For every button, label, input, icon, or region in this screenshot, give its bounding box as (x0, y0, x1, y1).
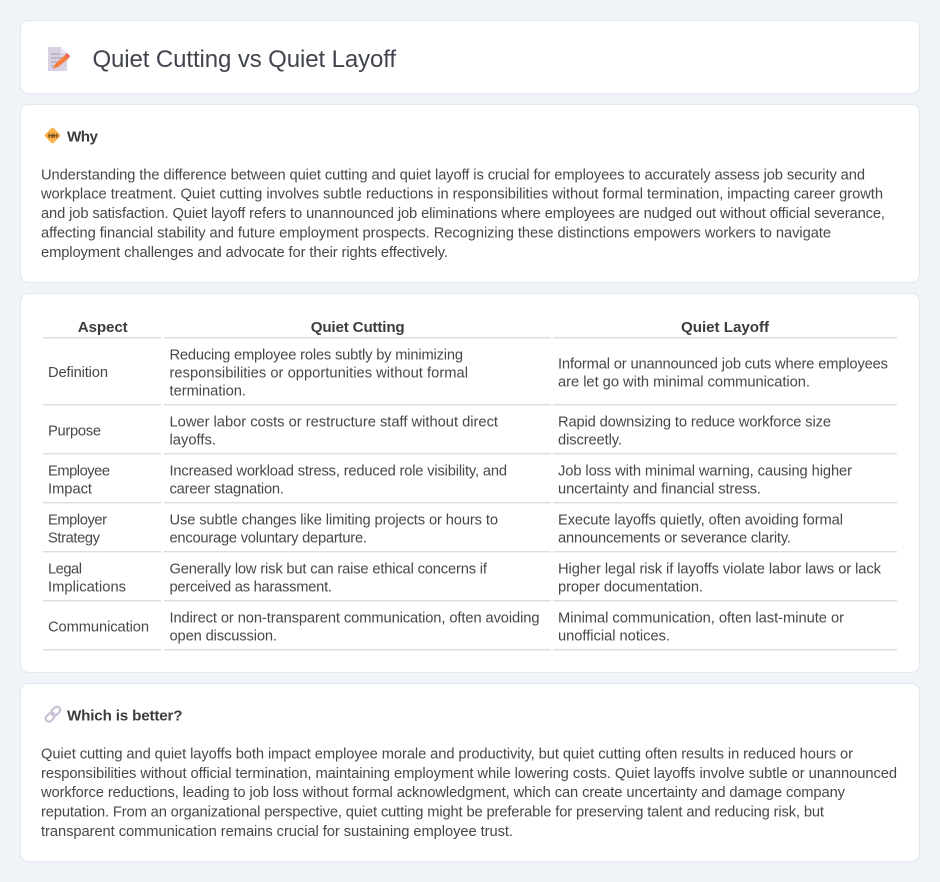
row: communication: Minimal communication, often last-minute or (558, 610, 844, 626)
row: purpose: Rapid downsizing to reduce workforce size (558, 414, 831, 430)
icon: memo with pencil (48, 47, 70, 71)
row: communication (48, 610, 844, 644)
row: legal implications: Implications (48, 579, 126, 595)
row: employer strategy: encourage voluntary departure. (170, 530, 367, 546)
row: purpose: layoffs. (170, 432, 216, 448)
row: employee impact (48, 463, 852, 497)
table header: Quiet Cutting (311, 319, 405, 336)
panel: comparison table (20, 294, 920, 672)
row: employer strategy: Execute layoffs quietly, often avoiding formal (558, 512, 843, 528)
row: definition: responsibilities or opportunities without formal (170, 365, 468, 381)
row: employee impact: Job loss with minimal warning, causing higher (558, 463, 852, 479)
row: definition (48, 347, 888, 399)
row: definition: Informal or unannounced job cuts where employees (558, 356, 888, 372)
row: employer strategy: Strategy (48, 530, 101, 546)
heading: why: Why (67, 129, 99, 146)
row: employee impact: uncertainty and financial stress. (558, 481, 761, 497)
row: purpose (48, 414, 831, 448)
title: Quiet Cutting vs Quiet Layoff (92, 46, 396, 73)
row: employer strategy: announcements or severance clarity. (558, 530, 791, 546)
row: definition: termination. (170, 383, 246, 399)
text block: why paragraph: Understanding the difference between quiet cutting and quiet layoff is crucial for employees to accurately assess job security and (41, 167, 865, 183)
row: definition: are let go with minimal communication. (558, 374, 810, 390)
text block: which is better paragraph: Quiet cutting and quiet layoffs both impact employee morale and productivity, but quiet cutting often results in reduced hours or (41, 746, 853, 762)
text block: which is better paragraph: transparent communication remains crucial for sustaining employee trust. (41, 824, 513, 840)
text block: which is better paragraph: workforce reductions, leading to job loss without formal acknowledgment, which can create uncertainty and damage company (40, 785, 846, 801)
table header: Quiet Layoff (681, 319, 770, 336)
row: employee impact: Employee (48, 463, 110, 479)
row: legal implications (48, 561, 882, 595)
row: employee impact: Impact (48, 481, 92, 497)
row: communication: unofficial notices. (558, 628, 670, 644)
row: employer strategy: Employer (48, 512, 107, 528)
text block: why paragraph: workplace treatment. Quiet cutting involves subtle reductions in responsibilities without formal termination, impacting career growth (40, 187, 883, 203)
row: employer strategy: Use subtle changes like limiting projects or hours to (170, 512, 498, 528)
row: legal implications: proper documentation. (558, 579, 703, 595)
row: definition: Reducing employee roles subtly by minimizing (170, 347, 463, 363)
row: legal implications: Generally low risk but can raise ethical concerns if (170, 561, 488, 577)
table header: Aspect (78, 319, 128, 336)
row: employee impact: career stagnation. (170, 481, 284, 497)
panel: why (20, 104, 920, 282)
table header (78, 319, 770, 336)
text block: why paragraph: employment challenges and advocate for their rights effectively. (41, 245, 448, 261)
text block: why paragraph: and job satisfaction. Quiet layoff refers to unannounced job eliminations where employees are nudged out without official severance, (41, 206, 885, 222)
row: purpose: Purpose (48, 423, 101, 439)
heading: which is better: Which is better? (67, 708, 182, 725)
row: legal implications: perceived as harassment. (170, 579, 332, 595)
icon: chain link (44, 705, 62, 723)
row: legal implications: Legal (48, 561, 82, 577)
row: employee impact: Increased workload stress, reduced role visibility, and (170, 463, 507, 479)
row: communication: open discussion. (170, 628, 277, 644)
panel: which is better (20, 684, 920, 862)
text block: which is better paragraph: responsibilities without official termination, maintaining employment while lowering costs. Quiet layoffs involve subtle or unannounced (41, 766, 897, 782)
row: employer strategy (48, 512, 843, 546)
panel: header (20, 20, 920, 94)
text block: why paragraph (40, 167, 885, 261)
row: communication: Indirect or non-transparent communication, often avoiding (170, 610, 540, 626)
row: definition: Definition (48, 365, 108, 381)
text block: which is better paragraph: reputation. From an organizational perspective, quiet cutting might be preferable for preserving talent and reducing risk, but (41, 805, 824, 821)
icon: diamond sign (44, 127, 61, 144)
text block: which is better paragraph (40, 746, 897, 840)
text block: why paragraph: affecting financial stability and future employment prospects. Recognizing these distinctions empowers workers to navigate (41, 226, 831, 242)
row: purpose: Lower labor costs or restructure staff without direct (170, 414, 498, 430)
row: communication: Communication (48, 619, 149, 635)
row: purpose: discreetly. (558, 432, 622, 448)
row: legal implications: Higher legal risk if layoffs violate labor laws or lack (558, 561, 882, 577)
